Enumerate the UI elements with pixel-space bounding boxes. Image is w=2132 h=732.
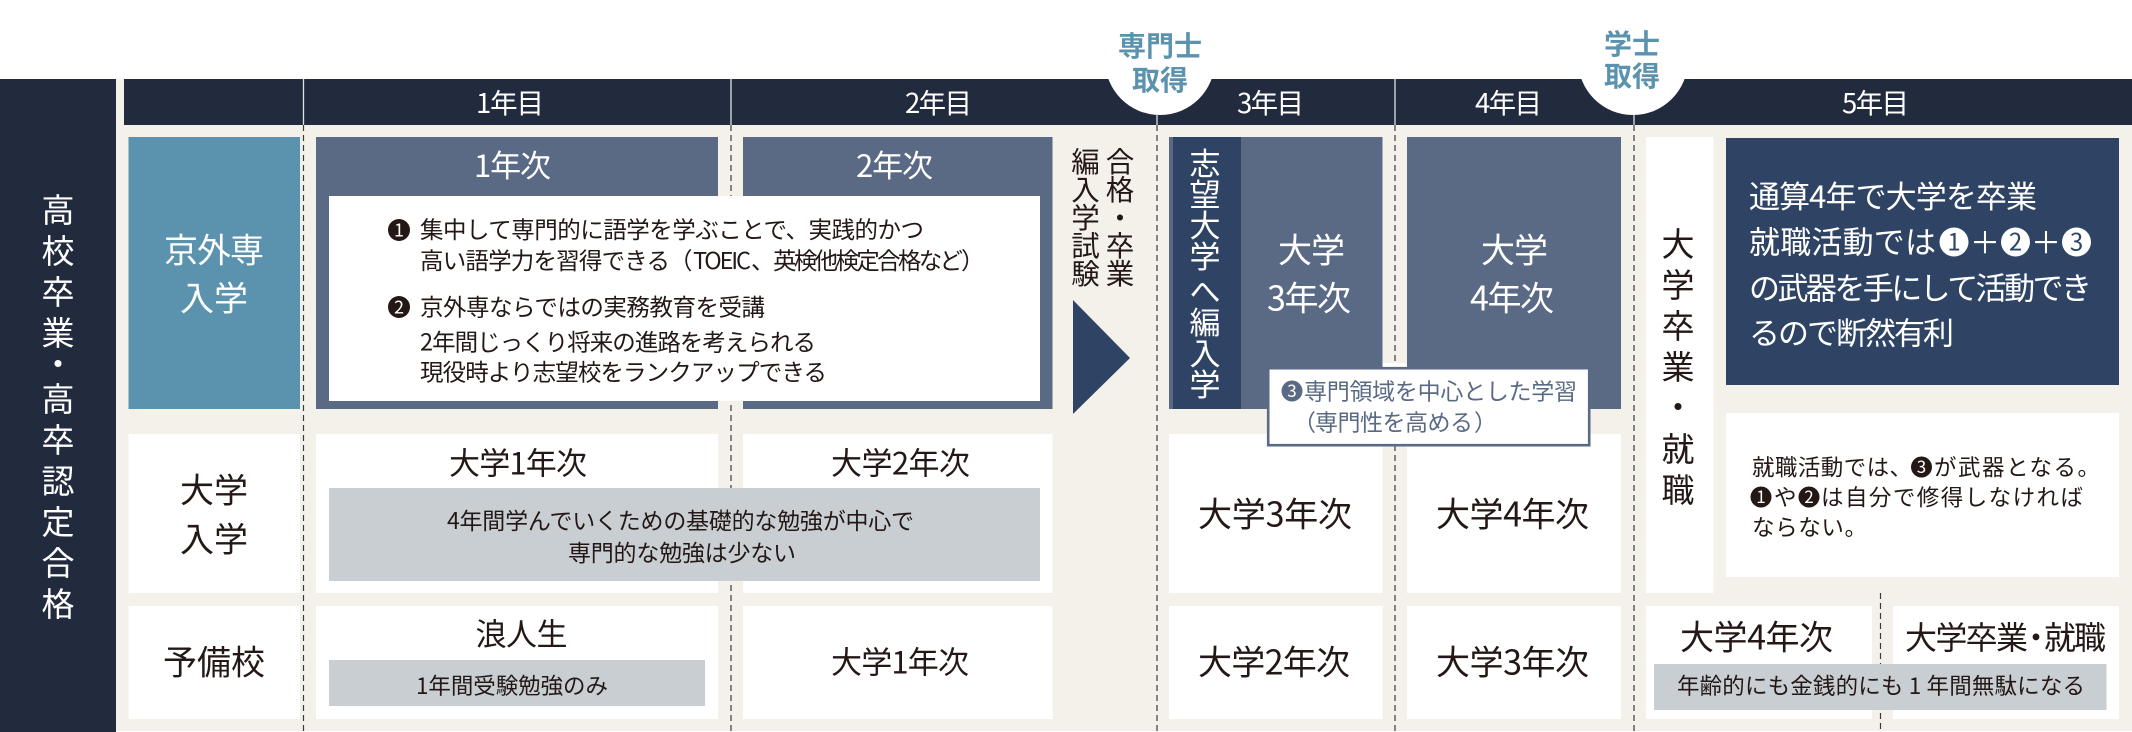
year 1 label: 1年目 [476, 81, 544, 121]
transfer exam label: 編入学試験 [1071, 140, 1100, 293]
white text panel: benefits: 、 [751, 242, 774, 276]
arrow: transfer into university [1073, 300, 1130, 414]
weapon badges 1 + 2 + 3: ＋ [1970, 218, 2000, 262]
white text panel: benefits [329, 196, 1040, 401]
bullet 1 [388, 216, 410, 242]
row 3: university year 4: 大学4年次 [1680, 610, 1833, 660]
row 1: 京外専 entry [128, 137, 300, 409]
white text panel: benefits: TOEIC [693, 242, 751, 276]
row 2: university year 3 [1169, 434, 1382, 593]
row 2: university entry: 入学 [180, 512, 248, 562]
milestone: associate title: 専門士 [1118, 25, 1202, 65]
panel: 京外専 advantage: の武器を手にして活動でき [1749, 263, 2092, 308]
callout: specialised study: ） [1474, 404, 1497, 438]
weapon badges 1 + 2 + 3: 3 [2070, 222, 2083, 258]
panel: university year 3 after transfer [1169, 137, 1382, 409]
bullet 3 [1282, 377, 1302, 402]
panel: university path note [1726, 413, 2119, 577]
weapon badges 1 + 2 + 3: 2 [2009, 222, 2022, 258]
timeline header bar [124, 79, 2132, 125]
note: one year wasted [1654, 664, 2106, 710]
white text panel: benefits: 英検他検定合格など [773, 242, 963, 276]
bullet 1: 1 [394, 216, 404, 242]
row 3: gap year [316, 606, 718, 719]
row 2: university year 4: 大学4年次 [1436, 488, 1589, 536]
weapon badges 1 + 2 + 3: 1 [1947, 222, 1961, 258]
row 3: graduation and employment [1893, 606, 2119, 719]
transfer exam label [1071, 140, 1134, 293]
panel: 1st and 2nd year at 京外専 [316, 137, 1052, 409]
panel: university path note: が武器となる。 [1934, 450, 2100, 482]
note: foundation study: 専門的な勉強は少ない [568, 534, 796, 568]
panel: 京外専 advantage [1726, 138, 2119, 385]
row 2: university entry [128, 434, 300, 593]
row 2: university year 2: 大学2年次 [831, 438, 970, 484]
2nd year heading: 2年次 [856, 141, 933, 186]
milestone: bachelor title [1578, 0, 1688, 115]
1st year heading: 1年次 [474, 141, 551, 186]
row 3: university year 4 [1646, 606, 1872, 719]
milestone: bachelor title: 取得 [1604, 55, 1660, 95]
row 2: university year 2 [743, 434, 1052, 593]
column: graduation and employment: 大学卒業・就職 [1662, 218, 1694, 512]
year 5 label: 5年目 [1842, 81, 1909, 121]
panel: 京外専 advantage: 通算4年で大学を卒業 [1749, 172, 2037, 217]
note: one year of exam study [329, 660, 705, 706]
row 3: university year 1: 大学1年次 [831, 638, 969, 682]
sidebar: high school graduation: 高校卒業・高卒認定合格 [42, 184, 74, 626]
row 2: university year 3: 大学3年次 [1198, 488, 1352, 536]
row 3: university year 3 [1407, 606, 1621, 719]
white text panel: benefits: 京外専ならではの実務教育を受講 [420, 289, 765, 323]
badge 3: 3 [1917, 453, 1926, 478]
panel: university path note: は自分で修得しなければ [1821, 480, 2083, 512]
badge 1 [1750, 483, 1772, 508]
row 2: university year 1: 大学1年次 [449, 438, 587, 484]
panel: 京外専 advantage: 就職活動では [1749, 217, 1936, 262]
panel: university year 4 after transfer [1407, 137, 1621, 409]
transfer exam label: 合格・卒業 [1106, 140, 1134, 293]
column: graduation and employment [1646, 137, 1714, 593]
white text panel: benefits: 現役時より志望校をランクアップできる [420, 354, 827, 388]
row 3: university year 2 [1169, 606, 1382, 719]
white text panel: benefits: （ [669, 242, 692, 276]
note: foundation study [329, 488, 1040, 581]
weapon badges 1 + 2 + 3: ＋ [2031, 218, 2061, 262]
weapon badges 1 + 2 + 3 [1940, 218, 2091, 262]
panel: university path note: ならない。 [1752, 510, 1867, 542]
row 3: university year 3: 大学3年次 [1436, 636, 1589, 684]
row 3: university year 1 [743, 606, 1052, 719]
row 3: graduation and employment: 大学卒業 [1905, 613, 2028, 659]
white text panel: benefits: 2年間じっくり将来の進路を考えられる [420, 324, 816, 358]
year 2 label: 2年目 [905, 81, 972, 121]
year 4 label: 4年目 [1475, 81, 1542, 121]
white text panel: benefits: 集中して専門的に語学を学ぶことで、実践的かつ [420, 211, 924, 245]
milestone: bachelor title: 学士 [1604, 23, 1660, 63]
callout: specialised study: 専門領域を中心とした学習 [1304, 372, 1577, 406]
panel: university year 4 after transfer: 4年次 [1470, 272, 1554, 320]
panel: university path note: や [1774, 480, 1797, 512]
badge 1: 1 [1756, 483, 1766, 508]
white text panel: benefits: 高い語学力を習得できる [420, 242, 670, 276]
badge 3 [1911, 453, 1932, 478]
panel: 京外専 advantage: るので断然有利 [1749, 308, 1954, 353]
bullet 2: 2 [394, 294, 404, 320]
callout: specialised study: （ [1293, 404, 1316, 438]
callout: specialised study [1268, 368, 1589, 445]
callout: specialised study: 専門性を高める [1315, 404, 1473, 438]
bullet 3: 3 [1287, 377, 1297, 402]
row 1: 京外専 entry: 京外専 [164, 224, 264, 272]
sidebar: high school graduation [0, 79, 116, 732]
panel: university year 3 after transfer: 大学 [1278, 224, 1345, 272]
milestone: associate title [1105, 0, 1215, 115]
row 2: university year 4 [1407, 434, 1621, 593]
row 3: gap year: 浪人生 [476, 610, 568, 654]
note: foundation study: 4年間学んでいくための基礎的な勉強が中心で [447, 502, 914, 536]
row 3: graduation and employment: 就職 [2044, 613, 2106, 659]
white text panel: benefits: ） [961, 242, 984, 276]
badge 2 [1798, 483, 1820, 508]
row 1: 京外専 entry: 入学 [180, 272, 248, 320]
badge 2: 2 [1804, 483, 1814, 508]
milestone: associate title: 取得 [1132, 59, 1188, 99]
row 3: university year 2: 大学2年次 [1198, 636, 1350, 684]
row 2: university year 1 [316, 434, 718, 593]
panel: university path note: 就職活動では、 [1752, 450, 1912, 482]
row 2: university entry: 大学 [180, 464, 248, 512]
panel: university year 4 after transfer: 大学 [1481, 224, 1548, 272]
bullet 2 [388, 294, 410, 320]
row 3: graduation and employment: ・ [2020, 613, 2052, 659]
note: one year of exam study: 1年間受験勉強のみ [416, 669, 608, 701]
panel: university year 3 after transfer: 志望大学へ編入学 [1190, 139, 1220, 405]
note: one year wasted: 年齢的にも金銭的にも 1 年間無駄になる [1677, 669, 2085, 701]
panel: university year 3 after transfer: 3年次 [1267, 272, 1351, 320]
row 3: prep school [128, 606, 300, 719]
year 3 label: 3年目 [1237, 81, 1304, 121]
row 3: prep school: 予備校 [163, 636, 265, 684]
